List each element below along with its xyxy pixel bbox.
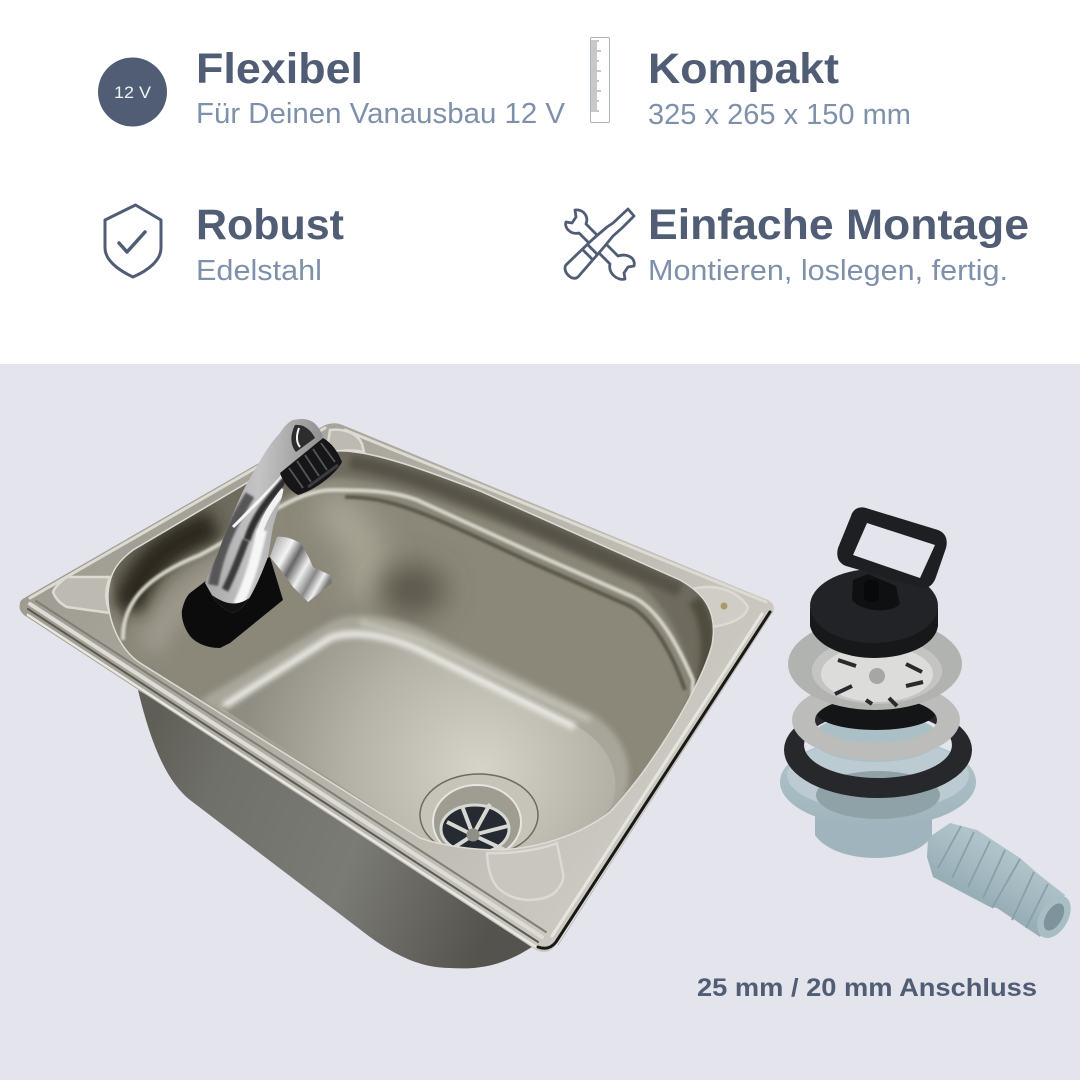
icon: crossed wrench and screwdriver — [565, 209, 634, 279]
text: material: Edelstahl — [196, 255, 322, 287]
panel: product background — [0, 364, 1080, 1080]
faucet spout — [205, 419, 323, 613]
text: dimensions: 325 x 265 x 150 mm — [648, 99, 911, 131]
black gasket — [784, 702, 972, 798]
faucet lever — [270, 537, 332, 602]
faucet aerator — [280, 438, 342, 495]
sink basin — [108, 452, 713, 850]
product: drain fitting kit — [780, 507, 1078, 944]
text: assembly description: Montieren, loslegen, fertig. — [648, 255, 1008, 287]
plug hinge — [852, 574, 900, 610]
icon: 12 V circle: 12 V — [114, 83, 152, 102]
basin floor — [201, 613, 631, 816]
feature: Robust — [105, 201, 344, 287]
blue drain cup — [780, 737, 976, 858]
icon: ruler — [590, 38, 610, 122]
drain — [420, 774, 538, 859]
plug handle — [837, 507, 947, 588]
feature: Kompakt — [590, 38, 911, 131]
icon: shield with check — [105, 205, 161, 277]
faucet black base — [182, 557, 283, 648]
product: stainless steel sink — [20, 423, 774, 968]
caption: connection sizes: 25 mm / 20 mm Anschluss — [697, 974, 1037, 1002]
wall ridge — [120, 486, 696, 697]
grey washer — [792, 680, 960, 760]
feature: Einfache Montage — [565, 201, 1029, 287]
product: faucet — [182, 410, 342, 648]
sink outer body — [138, 690, 540, 968]
basin rim line — [108, 451, 713, 850]
heading: Kompakt: Kompakt — [648, 45, 839, 93]
steel strainer — [788, 618, 962, 710]
text: Flexibel description: Für Deinen Vanausbau 12 V — [196, 98, 566, 130]
corner pads — [53, 430, 748, 900]
rim edge highlights — [28, 428, 773, 948]
outlet hose connector — [927, 823, 1078, 944]
icon: 12 V circle — [98, 58, 167, 126]
heading: Flexibel: Flexibel — [196, 45, 363, 93]
feature: Flexibel — [98, 45, 566, 130]
black plug — [810, 569, 938, 658]
logo stamp on pad — [720, 602, 728, 610]
heading: Robust: Robust — [196, 201, 344, 249]
inner blue ring — [812, 714, 940, 762]
heading: Einfache Montage: Einfache Montage — [648, 201, 1029, 249]
sink rim — [20, 423, 774, 952]
dark gap under strainer — [816, 694, 936, 730]
